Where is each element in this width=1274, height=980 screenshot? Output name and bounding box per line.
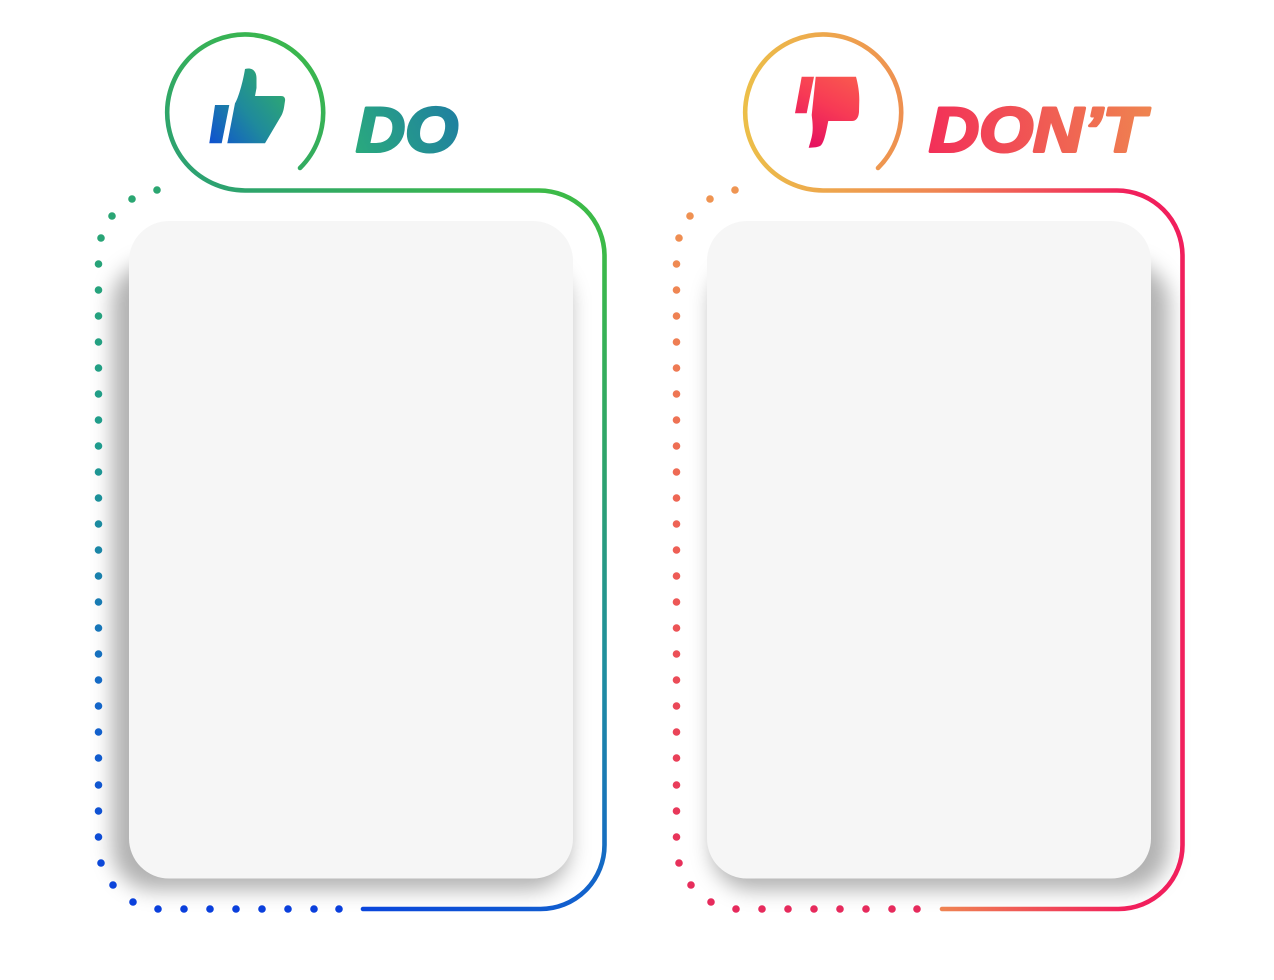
green to blue outline with circle	[167, 35, 605, 909]
dotted outline: do	[95, 186, 343, 913]
icon: thumbs up	[209, 68, 285, 143]
orange to pink outline with circle	[745, 35, 1182, 909]
icon: thumbs down	[795, 77, 859, 148]
heading: don't: DON’T	[929, 96, 1150, 166]
card: do	[129, 221, 573, 878]
heading: do: DO	[356, 96, 458, 166]
dotted outline: don't	[673, 186, 921, 913]
panel: do	[95, 35, 604, 913]
card: don't	[707, 221, 1151, 878]
card shadow: don't	[711, 262, 1169, 890]
panel: don't	[673, 35, 1182, 913]
card shadow: do	[112, 262, 570, 890]
